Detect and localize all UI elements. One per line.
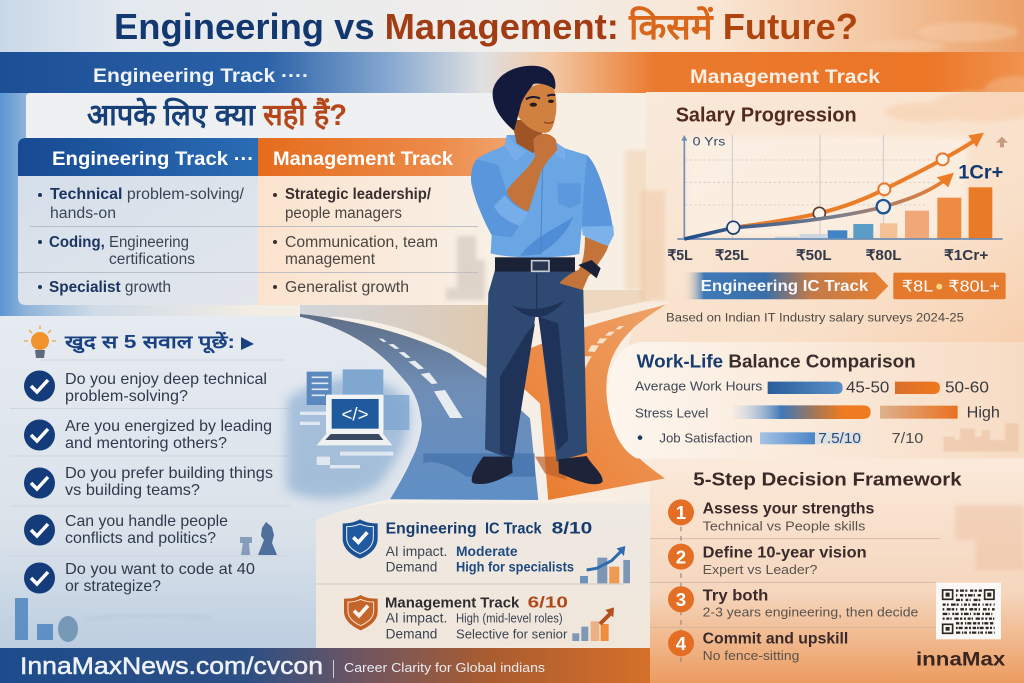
row: work hours: 45-50	[846, 380, 889, 397]
x axis labels: ₹25L	[715, 248, 749, 264]
sleeve right	[582, 155, 613, 230]
shirt and arms	[471, 120, 614, 290]
panel: salary progression	[628, 76, 1024, 345]
engineering outlook: Engineering	[386, 520, 477, 537]
step 4	[668, 630, 848, 663]
salary range badge: ₹80L+	[948, 279, 1000, 296]
header text left: Engineering Track ···	[52, 148, 254, 170]
step 2: Expert vs Leader?	[703, 562, 817, 577]
panel: footer	[0, 648, 650, 683]
heading: 5-Step Decision Framework	[693, 469, 962, 490]
track banner	[683, 272, 888, 299]
clouds	[865, 22, 1018, 52]
row: stress level: Stress Level	[635, 406, 708, 421]
management outlook: 6/10	[528, 594, 568, 611]
step 3: 2-3 years engineering, then decide	[703, 605, 918, 620]
trousers	[485, 270, 587, 462]
road verges	[300, 317, 553, 507]
engineering bullets: Coding, Engineering	[49, 234, 189, 251]
panel: framework background	[650, 459, 1024, 683]
engineering outlook	[343, 518, 630, 583]
value label: 1Cr+	[958, 162, 1003, 183]
icon: watch	[578, 260, 601, 278]
management bullets: people managers	[285, 205, 402, 222]
question 2: and mentoring others?	[65, 435, 227, 452]
table header left	[18, 138, 258, 176]
title: Engineering vs Management: किसमें Future?	[114, 6, 858, 47]
panel: comparison table	[18, 138, 510, 305]
question 1	[24, 370, 267, 405]
icon: chess pieces	[240, 522, 277, 555]
shadow on road	[423, 453, 535, 477]
cuff left	[494, 195, 528, 226]
source note: Based on Indian IT Industry salary surveys 2024-25	[666, 311, 964, 325]
panel: five-step framework	[650, 469, 1024, 671]
step 1: Assess your strengths	[703, 500, 874, 517]
website: InnaMaxNews.com/cvcon	[20, 653, 323, 680]
engineering bullets: hands-on	[50, 205, 116, 222]
salary range badge: ₹8L	[902, 279, 933, 296]
management bullets: Communication, team	[285, 234, 438, 251]
management outlook: Selective for senior	[456, 627, 568, 642]
question 2	[24, 418, 272, 452]
row: job satisfaction: Job Satisfaction	[659, 430, 753, 445]
heading with bulb	[24, 326, 254, 358]
x axis labels: ₹1Cr+	[944, 248, 988, 264]
road dashes: management	[581, 326, 624, 368]
step 4: 4	[676, 633, 687, 654]
line: management	[733, 133, 984, 228]
band heading: management: Management Track	[690, 66, 880, 88]
icon: blue shield	[343, 519, 378, 559]
road: management	[521, 303, 670, 500]
management outlook: Management Track	[385, 595, 520, 611]
panel: prompt heading	[26, 93, 506, 145]
shirt body	[471, 135, 587, 258]
icon: growth chart	[572, 607, 614, 641]
bars	[775, 187, 992, 239]
QR code	[936, 583, 1001, 639]
question 2: Are you energized by leading	[65, 418, 272, 435]
shoes	[472, 456, 603, 484]
engineering outlook: Demand	[386, 560, 437, 575]
step 1: 1	[676, 502, 686, 523]
row: job satisfaction	[638, 430, 923, 447]
head	[493, 66, 556, 133]
engineering outlook: Moderate	[456, 544, 518, 559]
step 1	[668, 499, 874, 534]
icon: small skyline	[15, 598, 210, 642]
engineering outlook: IC Track	[485, 520, 542, 537]
step 2	[668, 544, 867, 577]
shirt shadow	[520, 217, 573, 256]
top colour band	[0, 52, 1024, 93]
icon: growth chart	[580, 546, 630, 583]
brand mark: innaMax	[916, 650, 1006, 671]
panel: five questions	[0, 316, 421, 648]
icon: laptop with code	[287, 369, 410, 498]
question 3	[24, 465, 273, 499]
table body left	[18, 176, 258, 305]
step 2: Define 10-year vision	[703, 544, 867, 561]
row: job satisfaction: 7/10	[892, 430, 923, 447]
table body right	[258, 176, 498, 305]
engineering outlook: 8/10	[552, 518, 592, 537]
question list	[10, 360, 300, 600]
panel: work-life balance	[607, 342, 1024, 458]
management outlook: High (mid-level roles)	[456, 612, 563, 626]
cuff right	[582, 226, 614, 246]
step 1: Technical vs People skills	[703, 519, 866, 534]
heading: Work-Life Balance Comparison	[637, 351, 916, 372]
engineering bullets	[38, 186, 245, 296]
panel: future outlook	[316, 503, 650, 648]
sleeve left	[471, 159, 528, 237]
shirt pocket	[557, 183, 581, 208]
management bullets: Generalist growth	[285, 279, 409, 296]
axis label: 0 Yrs	[693, 135, 725, 149]
heading text: आपके लिए क्या सही हैं?	[87, 97, 347, 132]
person: thoughtful engineer at crossroads	[471, 66, 614, 484]
axes	[677, 138, 1003, 239]
question 4: Can you handle people	[65, 513, 228, 530]
question 1: Do you enjoy deep technical	[65, 371, 267, 388]
tagline: Career Clarity for Global indians	[344, 660, 546, 675]
question 5: or strategize?	[65, 578, 161, 595]
question 5	[24, 561, 255, 595]
step 3: Try both	[703, 588, 768, 605]
heading: Salary Progression	[676, 105, 857, 127]
management bullets	[273, 186, 438, 296]
row: stress level: High	[967, 404, 1000, 421]
management bullets: Strategic leadership/	[285, 186, 432, 203]
questions heading: खुद स 5 सवाल पूछें:	[64, 331, 235, 354]
band heading: engineering: Engineering Track ····	[93, 66, 309, 87]
row: work hours: Average Work Hours	[635, 379, 763, 394]
forearm and hand at chin	[507, 134, 557, 212]
line: engineering	[684, 173, 954, 239]
faint skyline	[446, 236, 485, 300]
row: stress level	[635, 404, 1000, 421]
ground	[300, 305, 500, 397]
icon: light bulb	[24, 326, 56, 358]
header text right: Management Track	[273, 148, 453, 170]
step 4: No fence-sitting	[703, 648, 799, 663]
icon: orange shield	[344, 595, 378, 630]
collar	[505, 135, 565, 162]
icon: laptop with code: </>	[342, 403, 368, 424]
question 3: vs building teams?	[65, 482, 200, 499]
x axis labels: ₹80L	[866, 248, 902, 264]
step 4: Commit and upskill	[703, 630, 848, 647]
step 2: 2	[676, 546, 686, 567]
row: job satisfaction: 7.5/10	[818, 430, 861, 447]
right forearm	[559, 237, 608, 290]
step 3	[668, 586, 918, 620]
question 3: Do you prefer building things	[65, 465, 273, 482]
clouds	[885, 76, 1024, 122]
row: work hours: 50-60	[945, 380, 989, 397]
question 4	[24, 513, 228, 547]
x axis labels: ₹5L	[667, 248, 693, 264]
belt	[495, 257, 575, 272]
neck	[512, 120, 543, 153]
management outlook	[344, 594, 614, 642]
step 3: 3	[676, 589, 686, 610]
question 4: conflicts and politics?	[65, 530, 216, 547]
road: engineering	[300, 314, 538, 500]
management bullets: management	[285, 251, 376, 268]
x axis labels	[667, 248, 988, 264]
roads	[300, 290, 700, 507]
salary range badge	[893, 273, 1006, 299]
small arrow marker	[996, 137, 1008, 147]
question 5: Do you want to code at 40	[65, 561, 255, 578]
table header right	[258, 138, 510, 176]
engineering bullets: Technical problem-solving/	[50, 186, 245, 203]
engineering bullets: Specialist growth	[49, 279, 171, 296]
management outlook: AI impact.	[386, 611, 447, 626]
question 1: problem-solving?	[65, 388, 188, 405]
road dashes: engineering	[379, 339, 463, 418]
track banner: Engineering IC Track	[701, 278, 869, 295]
management outlook: Demand	[386, 627, 437, 642]
engineering outlook: High for specialists	[456, 560, 574, 575]
line chart	[666, 133, 1008, 325]
row: work hours	[635, 379, 989, 397]
x axis labels: ₹50L	[796, 248, 832, 264]
engineering outlook: AI impact.	[386, 544, 447, 559]
engineering bullets: certifications	[109, 251, 195, 268]
